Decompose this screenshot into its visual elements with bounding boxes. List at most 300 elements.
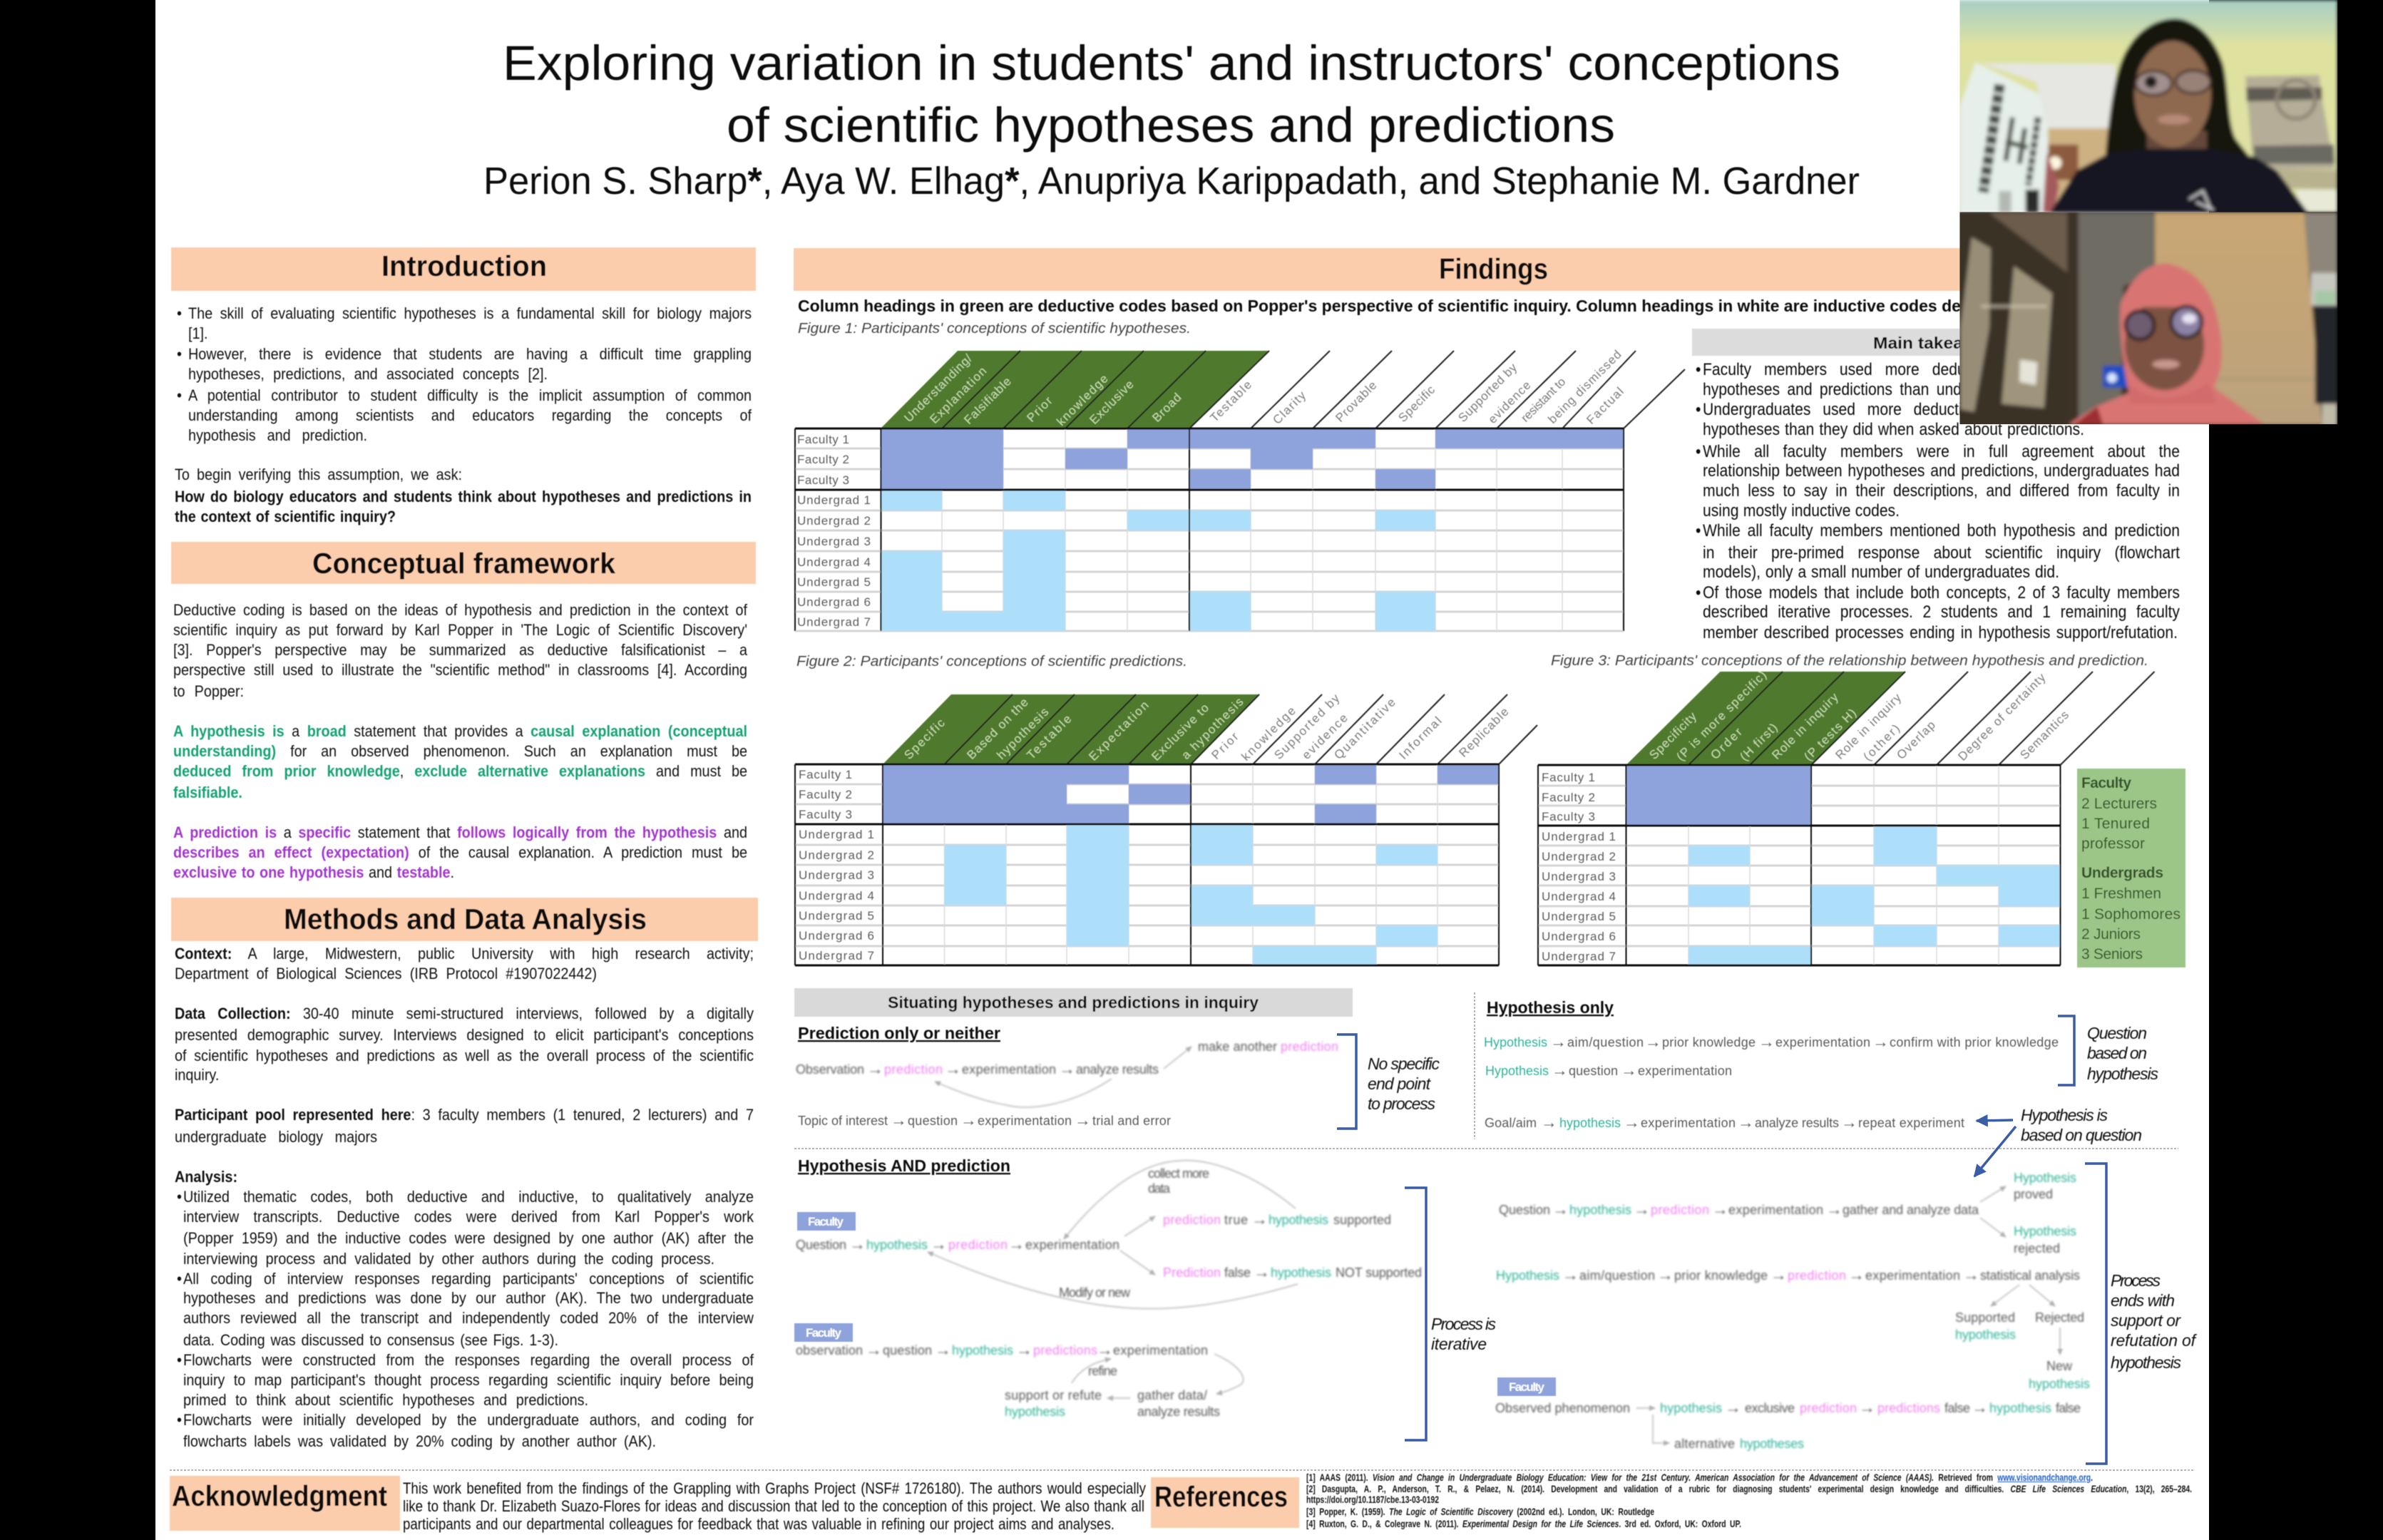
flow: question to gather and analyze data: →	[1826, 1200, 1843, 1218]
figure 1: hypotheses table: Specific	[1395, 383, 1438, 425]
text: main takeaways list	[1696, 360, 2180, 642]
text: main takeaways list: Of those models that include both concepts, 2 of 3 faculty members	[1703, 583, 2180, 602]
participants legend: 1 Tenured	[2081, 816, 2150, 832]
flow: observation to experimentation with loop: experimentation	[1113, 1343, 1208, 1357]
note: question based on hypothesis	[2087, 1024, 2159, 1083]
note: no specific end point to process: end point	[1368, 1074, 1432, 1093]
participants legend: 2 Juniors	[2081, 926, 2141, 943]
text: main takeaways list: •	[1696, 583, 1701, 602]
badge: faculty: Faculty	[808, 1215, 844, 1228]
text: methods and data analysis body: Department of Biological Sciences (IRB Protocol #1907022442)	[175, 965, 597, 982]
findings intro sentence: Column headings in green are deductive codes based on Popper's perspective of scientific inquiry. Column headings in white are inductive codes derived	[798, 297, 2000, 315]
flow: topic of interest to trial and error: Topic of interest	[798, 1114, 888, 1128]
flow: question to experimentation: false	[1224, 1266, 1251, 1280]
flow: observation to analyze results: →	[1059, 1059, 1075, 1078]
text: methods and data analysis body: authors reviewed all the transcript and independently coded 20% of the interview	[183, 1309, 754, 1327]
note: process is iterative: iterative	[1431, 1335, 1487, 1353]
participants legend	[2077, 769, 2185, 967]
figure 3: relationship table: (other)	[1860, 722, 1902, 764]
figure 2: predictions table: Undergrad 5	[799, 909, 874, 923]
figure 2: predictions table: Based on the	[964, 695, 1031, 762]
text: methods and data analysis body: interviewing process and validated by other authors during the coding process.	[183, 1250, 714, 1268]
text: conceptual framework body: deduced from prior knowledge, exclude alternative explanations and must be	[173, 762, 747, 780]
text: methods and data analysis body: Analysis:	[175, 1168, 237, 1186]
text: acknowledgment body	[402, 1479, 1147, 1533]
participants legend: 3 Seniors	[2081, 946, 2143, 962]
figure 1: hypotheses table: Broad	[1149, 391, 1184, 425]
flow: hypothesis to statistical analysis: aim/question	[1579, 1268, 1655, 1283]
figure 2: predictions table: Undergrad 7	[799, 949, 874, 962]
bracket: process is iterative	[1405, 1188, 1426, 1440]
heading: Methods and Data Analysis	[171, 898, 758, 941]
flowchart group: hypothesis and prediction, left: Hypothesis AND prediction	[798, 1156, 1010, 1175]
text: introduction body: To begin verifying this assumption, we ask:	[175, 466, 462, 483]
figure 3: relationship table: Order	[1708, 725, 1745, 762]
figure 3: relationship table	[1538, 668, 2155, 965]
title: Perion S. Sharp*, Aya W. Elhag*, Anupriya Karippadath, and Stephanie M. Gardner	[483, 160, 1860, 202]
flow: question to gather and analyze data: rejected	[2014, 1241, 2060, 1256]
text: methods and data analysis body	[175, 945, 754, 1450]
participants legend: 1 Freshmen	[2081, 885, 2161, 902]
flow: hypothesis to confirm with prior knowledge: Hypothesis	[1484, 1035, 1547, 1049]
figure 1: hypotheses table	[795, 348, 1685, 631]
flow: observation to analyze results: make another	[1198, 1040, 1277, 1054]
text: introduction body: However, there is evidence that students are having a difficult time grappling	[188, 345, 752, 363]
figure 1: hypotheses table: Undergrad 1	[797, 493, 871, 507]
flow: hypothesis to confirm with prior knowledge: confirm with prior knowledge	[1890, 1035, 2059, 1049]
flow: question to experimentation: true	[1224, 1213, 1248, 1227]
note: process ends with support or refutation: refutation of	[2111, 1331, 2198, 1350]
figure 2: green header	[883, 694, 1259, 764]
heading: Conceptual framework	[171, 542, 756, 584]
flow: hypothesis to statistical analysis: →	[1562, 1266, 1579, 1284]
text: conceptual framework body: describes an effect (expectation) of the causal explanation. A prediction must be	[173, 843, 747, 861]
flow: question to experimentation: hypothesis	[1271, 1266, 1331, 1280]
flow: hypothesis to statistical analysis: hypothesis	[1955, 1328, 2016, 1342]
text: conceptual framework body: perspective still used to illustrate the "scientific method" in classrooms [4]. According	[173, 661, 747, 679]
badge: faculty: Faculty	[806, 1326, 842, 1340]
title	[483, 36, 1860, 202]
figure 1: hypotheses table: Prior	[1024, 394, 1055, 425]
flow: goal to repeat experiment: →	[1624, 1113, 1640, 1131]
flow: question to gather and analyze data: →	[1634, 1200, 1650, 1218]
text: introduction body: hypotheses, predictions, and associated concepts [2].	[188, 365, 548, 383]
text: methods and data analysis body: All coding of interview responses regarding participants' conceptions of scientific	[183, 1270, 754, 1288]
webcam: speaker two	[1954, 210, 2337, 428]
figure 1: hypotheses table: evidence	[1485, 379, 1534, 426]
flow: hypothesis to confirm with prior knowledge: aim/question	[1567, 1035, 1644, 1049]
note: process ends with support or refutation: hypothesis	[2111, 1353, 2182, 1372]
text: methods and data analysis body: primed to think about scientific hypotheses and predictions.	[183, 1391, 588, 1409]
flow: question to gather and analyze data: prediction	[1651, 1203, 1709, 1217]
text: conceptual framework body: falsifiable.	[173, 784, 242, 801]
text: conceptual framework body: Deductive coding is based on the ideas of hypothesis and prediction in the context of	[173, 601, 747, 619]
text: conceptual framework body: scientific inquiry as put forward by Karl Popper in 'The Logic of Scientific Discovery'	[173, 621, 747, 639]
flow: observation to experimentation with loop: support or refute	[1005, 1388, 1102, 1402]
flow: question to experimentation: Question	[796, 1238, 846, 1252]
main takeaways heading bar: Main takeaways	[1873, 334, 2006, 352]
flow: hypothesis to confirm with prior knowledge: prior knowledge	[1662, 1035, 1756, 1049]
figure 1: hypotheses table: Falsifiable	[961, 374, 1014, 427]
flow: question to gather and analyze data: Hypothesis	[2014, 1171, 2076, 1185]
figure 2: predictions table: Faculty 3	[799, 808, 852, 821]
flow: observation to analyze results	[796, 1040, 1338, 1107]
flow: question to gather and analyze data: Hypothesis	[2014, 1224, 2076, 1238]
flow: observation to analyze results: experimentation	[962, 1062, 1056, 1077]
text: methods and data analysis body: interview transcripts. Deductive codes were derived from Karl Popper's work	[183, 1208, 754, 1226]
flow: goal to repeat experiment: hypothesis	[1559, 1116, 1621, 1130]
figure 1: hypotheses table: Clarity	[1270, 389, 1308, 427]
flow: hypothesis question experimentation: experimentation	[1638, 1064, 1732, 1078]
arrow: to goal flow	[1977, 1120, 2013, 1121]
flow: hypothesis to confirm with prior knowledge	[1484, 1032, 2059, 1051]
flow: observation to experimentation with loop: →	[1097, 1340, 1113, 1359]
flowchart group: prediction only or neither: Prediction only or neither	[798, 1024, 1000, 1042]
figure 3: relationship table: Role in inquiry	[1769, 690, 1841, 762]
flow: observed phenomenon to hypothesis false: Observed phenomenon	[1495, 1401, 1630, 1415]
note: no specific end point to process: No specific	[1368, 1054, 1440, 1073]
flow: hypothesis to statistical analysis: New	[2046, 1359, 2073, 1373]
figure 2 caption: Figure 2: Participants' conceptions of scientific predictions.	[796, 654, 1187, 669]
flow: hypothesis to statistical analysis: Rejected	[2035, 1310, 2084, 1325]
figure 2: predictions table: Exclusive to	[1149, 701, 1211, 764]
flow: goal to repeat experiment: →	[1841, 1113, 1857, 1131]
flow: observed phenomenon to hypothesis false: hypotheses	[1740, 1437, 1804, 1451]
flow: hypothesis question experimentation: Hypothesis	[1485, 1064, 1549, 1078]
flow: goal to repeat experiment: →	[1541, 1113, 1557, 1131]
note: process is iterative	[1431, 1315, 1496, 1353]
flowchart group: hypothesis only: Hypothesis only	[1487, 998, 1614, 1017]
flow: goal to repeat experiment: experimentation	[1641, 1116, 1736, 1130]
figure 2: predictions table: Testable	[1024, 712, 1074, 762]
flow: hypothesis to confirm with prior knowledge: →	[1872, 1032, 1889, 1051]
flow: question to experimentation: prediction	[948, 1238, 1008, 1252]
text: main takeaways list: Faculty members used more deductive codes when describing	[1703, 360, 2180, 379]
flow: observed phenomenon to hypothesis false: prediction	[1800, 1401, 1857, 1415]
flow: observed phenomenon to hypothesis false: hypothesis	[1660, 1401, 1722, 1415]
bracket: no specific end point	[1337, 1035, 1356, 1129]
text: methods and data analysis body: flowcharts labels was validated by 20% coding by another author (AK).	[183, 1432, 656, 1450]
participants legend: Faculty	[2081, 775, 2131, 791]
arrow: to question flow	[1974, 1126, 2016, 1176]
text: methods and data analysis body: (Popper 1959) and the inductive codes were designed by one author (AK) after the	[183, 1229, 754, 1247]
figure 2: predictions table: hypothesis	[994, 705, 1051, 762]
figure 2: predictions table: evidence	[1299, 711, 1351, 762]
text: main takeaways list: models), only a small number of undergraduates did.	[1703, 563, 2059, 582]
figure 2: predictions table: Supported by	[1271, 691, 1343, 762]
text: main takeaways list: hypotheses and predictions than undergraduates did.	[1703, 380, 2074, 399]
flow: observation to analyze results: Observation	[796, 1062, 864, 1077]
text: main takeaways list: •	[1696, 521, 1701, 540]
flow: question to gather and analyze data: gather and analyze data	[1843, 1203, 1979, 1217]
flow: question to experimentation: hypothesis	[1269, 1213, 1328, 1227]
flow: hypothesis to confirm with prior knowledge: →	[1550, 1032, 1567, 1051]
text: introduction body: •	[177, 386, 182, 404]
flowchart group: hypothesis only	[1484, 998, 2159, 1176]
text: references list: [2] Dasgupta, A. P., Anderson, T. R., & Pelaez, N. (2014). Development and validation of a rubric for diagnosing students' experimental design knowledge and difficulties. CBE Life Sciences Education, 13(2), 265–284.	[1306, 1483, 2192, 1494]
flow: question to experimentation: NOT supported	[1336, 1266, 1422, 1280]
figure 3: relationship table: (P tests H)	[1801, 706, 1859, 764]
flow: observation to experimentation with loop: question	[883, 1343, 932, 1357]
flow: observation to experimentation with loop: predictions	[1033, 1343, 1097, 1357]
text: main takeaways list: using mostly inductive codes.	[1703, 501, 1900, 520]
webcam videos	[1959, 0, 2337, 424]
figure 1: hypotheses table: Undergrad 2	[797, 514, 871, 528]
flow: topic of interest to trial and error: →	[891, 1111, 907, 1129]
figure 1: hypotheses table: Supported by	[1455, 361, 1520, 425]
flow: hypothesis to confirm with prior knowledge: experimentation	[1775, 1035, 1870, 1049]
figure 2: predictions table: Faculty 1	[799, 768, 852, 781]
figure 3: relationship table: Undergrad 5	[1542, 910, 1616, 923]
heading: Introduction	[171, 247, 756, 291]
flow: question to experimentation: Prediction	[1163, 1266, 1221, 1280]
figure 2: predictions table: Specific	[901, 716, 948, 762]
webcam: speaker one	[1954, 0, 2337, 212]
flow: observed phenomenon to hypothesis false: hypothesis	[1989, 1401, 2051, 1415]
flow: hypothesis to statistical analysis: hypothesis	[2029, 1377, 2090, 1391]
text: acknowledgment body: participants and our departmental colleagues for feedback that was valuable in refining our project aims and analyses.	[403, 1515, 1114, 1533]
figure 2: predictions table: Quantitative	[1331, 695, 1398, 762]
flow: hypothesis to statistical analysis: Hypothesis	[1496, 1268, 1559, 1283]
text: introduction body	[174, 304, 752, 526]
text: main takeaways list: described iterative processes. 2 students and 1 remaining faculty	[1703, 602, 2180, 622]
text: methods and data analysis body: inquiry.	[175, 1066, 219, 1084]
flow: goal to repeat experiment: →	[1738, 1113, 1754, 1131]
heading: Findings: Findings	[1439, 252, 1548, 285]
figure 2: predictions table: a hypothesis	[1179, 695, 1246, 762]
figure 3: relationship table: (P is more specific)	[1674, 668, 1769, 764]
figure 3: relationship table: Undergrad 7	[1542, 950, 1616, 963]
text: methods and data analysis body: •	[177, 1411, 182, 1429]
figure 1: hypotheses table: knowledge	[1054, 372, 1111, 428]
flow: question to experimentation: →	[1251, 1210, 1268, 1228]
flow: hypothesis to statistical analysis	[1496, 1266, 2090, 1391]
heading: situating hypotheses and predictions in inquiry	[794, 988, 1353, 1017]
flow: question to experimentation: hypothesis	[866, 1238, 928, 1252]
flow: hypothesis question experimentation: →	[1552, 1061, 1568, 1079]
badge: faculty: Faculty	[1509, 1380, 1545, 1394]
text: acknowledgment body: like to thank Dr. Elizabeth Suazo-Flores for ideas and discussion that led to the conception of this project. We also thank all	[403, 1497, 1144, 1515]
text: main takeaways list: •	[1696, 360, 1701, 379]
note: question based on hypothesis: based on	[2087, 1044, 2147, 1062]
flow: observed phenomenon to hypothesis false: exclusive	[1745, 1401, 1795, 1415]
text: introduction body: [1].	[188, 324, 208, 342]
note: process ends with support or refutation	[2111, 1271, 2198, 1372]
flow: goal to repeat experiment: repeat experiment	[1858, 1116, 1964, 1130]
text: introduction body: How do biology educators and students think about hypotheses and predictions in	[175, 488, 752, 505]
text: conceptual framework body	[173, 601, 748, 881]
flow: topic of interest to trial and error: trial and error	[1092, 1114, 1171, 1128]
figure 1: hypotheses table: Undergrad 4	[797, 555, 871, 569]
figure 1: hypotheses table: Provable	[1333, 379, 1379, 425]
figure 3: relationship table: (H first)	[1737, 721, 1780, 764]
participants legend: Undergrads	[2081, 865, 2163, 881]
text: methods and data analysis body: data. Coding was discussed to consensus (see Figs. 1-3).	[183, 1331, 558, 1349]
figure 2: predictions table: Informal	[1396, 714, 1445, 762]
flow: question to gather and analyze data: →	[1712, 1200, 1728, 1218]
note: process ends with support or refutation: ends with	[2111, 1291, 2175, 1310]
text: methods and data analysis body: Data Collection: 30-40 minute semi-structured interviews, followed by a digitally	[175, 1005, 754, 1022]
figure 2: predictions table: Replicable	[1456, 705, 1511, 760]
figure 3 caption: Figure 3: Participants' conceptions of the relationship between hypothesis and prediction.	[1551, 653, 2148, 669]
flow: topic of interest to trial and error: →	[1075, 1111, 1091, 1129]
flow: question to gather and analyze data: Question	[1499, 1203, 1550, 1217]
participants legend: 2 Lecturers	[2081, 796, 2157, 812]
figure 1: hypotheses table: Testable	[1207, 378, 1254, 425]
figure 2: predictions table: Undergrad 2	[799, 848, 874, 862]
flow: observation to analyze results: →	[867, 1059, 883, 1078]
heading: Conceptual framework: Conceptual framework	[312, 547, 615, 580]
figure 1: green header	[881, 351, 1269, 428]
figure 1: hypotheses table: Faculty 3	[797, 473, 849, 487]
figure 1: hypotheses table: Exclusive	[1087, 378, 1137, 427]
figure 1: hypotheses table: Undergrad 3	[797, 535, 871, 548]
heading: References	[1151, 1477, 1299, 1528]
flow: observed phenomenon to hypothesis false: alternative	[1674, 1437, 1735, 1451]
figure 2: predictions table: Undergrad 1	[799, 828, 874, 841]
flow: observation to experimentation with loop: hypothesis	[952, 1343, 1013, 1357]
note: process is iterative: Process is	[1431, 1315, 1496, 1333]
text: main takeaways list: member described processes ending in hypothesis support/refutation.	[1703, 623, 2178, 642]
note: process ends with support or refutation: support or	[2111, 1311, 2181, 1330]
figure 1: hypotheses table: Faculty 1	[797, 433, 849, 446]
text: main takeaways list: •	[1696, 400, 1701, 419]
text: references list: [1] AAAS (2011). Vision and Change in Undergraduate Biology Education: View for the 21st Century. American Association for the Advancement of Science (AAAS). Retrieved from www.visionandchange.org.	[1306, 1472, 2093, 1483]
note: question based on hypothesis: Question	[2087, 1024, 2147, 1042]
heading: Acknowledgment: Acknowledgment	[172, 1479, 387, 1512]
figure 2: predictions table: Undergrad 6	[799, 929, 874, 943]
note: hypothesis is based on question	[2021, 1106, 2142, 1144]
flow: hypothesis to statistical analysis: prediction	[1788, 1268, 1846, 1283]
text: introduction body: hypothesis and prediction.	[188, 426, 367, 444]
text: conceptual framework body: [3]. Popper's perspective may be summarized as deductive falsificationist – a	[173, 641, 747, 659]
text: main takeaways list: Undergraduates used more deductive codes when asked about	[1703, 400, 2180, 419]
flow: hypothesis question experimentation	[1485, 1061, 1732, 1079]
figure 1: faculty cells	[881, 428, 1624, 490]
flow: observed phenomenon to hypothesis false: predictions	[1877, 1401, 1940, 1415]
flow: observed phenomenon to hypothesis false: false	[2056, 1401, 2081, 1415]
flow: question to experimentation: collect more	[1148, 1166, 1209, 1181]
flow: question to experimentation: data	[1148, 1181, 1171, 1196]
flow: observation to experimentation with loop: →	[866, 1340, 882, 1359]
text: introduction body: A potential contributor to student difficulty is the implicit assumption of common	[188, 386, 752, 404]
figure 3: relationship table: Faculty 1	[1542, 771, 1595, 784]
flow: topic of interest to trial and error	[798, 1111, 1171, 1129]
main takeaways heading bar	[1692, 329, 2182, 356]
note: process ends with support or refutation: Process	[2111, 1271, 2161, 1290]
flow: observation to analyze results: →	[945, 1059, 961, 1078]
bracket: question based on hypothesis	[2058, 1016, 2074, 1085]
text: methods and data analysis body: •	[177, 1351, 182, 1369]
flow: hypothesis to confirm with prior knowledge: →	[1758, 1032, 1775, 1051]
flow: hypothesis question experimentation: →	[1621, 1061, 1637, 1079]
heading: Methods and Data Analysis: Methods and Data Analysis	[284, 903, 647, 935]
flow: hypothesis to statistical analysis: →	[1657, 1266, 1674, 1284]
text: main takeaways list: much less to say in their descriptions, and differed from faculty in	[1703, 481, 2180, 500]
figure 1: hypotheses table: Undergrad 6	[797, 595, 871, 609]
flow: question to gather and analyze data	[1499, 1171, 2076, 1256]
text: main takeaways list: While all faculty members mentioned both hypothesis and prediction	[1703, 521, 2180, 540]
heading: Findings	[794, 248, 2006, 291]
flow: observation to experimentation with loop: →	[1016, 1340, 1032, 1359]
figure 3: relationship table: Undergrad 1	[1542, 830, 1616, 843]
flow: observed phenomenon to hypothesis false: →	[1972, 1398, 1988, 1417]
heading: Introduction: Introduction	[381, 250, 547, 282]
text: introduction body: •	[177, 304, 182, 322]
flow: topic of interest to trial and error: question	[908, 1114, 958, 1128]
bracket: process ends with support	[2085, 1164, 2106, 1464]
note: hypothesis is based on question: based on question	[2021, 1126, 2142, 1144]
figure 2: predictions table: Faculty 2	[799, 788, 852, 801]
heading: Acknowledgment	[170, 1476, 400, 1531]
text: main takeaways list: in their pre-primed response about scientific inquiry (flowchart	[1703, 543, 2180, 563]
text: references list: [4] Ruxton, G. D., & Colegrave N. (2011). Experimental Design for the Life Sciences. 3rd ed. Oxford, UK: Oxford UP.	[1306, 1518, 1741, 1529]
flow: hypothesis to statistical analysis: →	[1848, 1266, 1865, 1284]
text: methods and data analysis body: of scientific hypotheses and predictions as well as the overall process of the scientific	[175, 1047, 754, 1064]
flow: question to experimentation: →	[849, 1235, 866, 1253]
figure 3: relationship table: Overlap	[1894, 718, 1938, 762]
figure 3: green header	[1626, 672, 1905, 765]
flow: observation to experimentation with loop: hypothesis	[1005, 1405, 1065, 1419]
flow: question to experimentation: →	[1008, 1235, 1025, 1253]
flow: hypothesis to statistical analysis: prior knowledge	[1674, 1268, 1768, 1283]
text: acknowledgment body: This work benefited from the findings of the Grappling with Graphs Project (NSF# 1726180). The authors would especially	[403, 1479, 1146, 1497]
flow: question to experimentation: Modify or new	[1059, 1285, 1131, 1300]
text: conceptual framework body: exclusive to one hypothesis and testable.	[173, 863, 454, 881]
flow: hypothesis to statistical analysis: Supported	[1955, 1310, 2015, 1325]
figure 3: relationship table: Specificity	[1646, 709, 1699, 762]
figure 2: predictions table: Undergrad 3	[799, 868, 874, 882]
text: conceptual framework body: to Popper:	[173, 682, 244, 700]
text: methods and data analysis body: •	[177, 1188, 182, 1206]
figure 1: hypotheses table: resistant to	[1518, 375, 1568, 425]
flowchart group: hypothesis and prediction, right	[1495, 1164, 2198, 1464]
flow: topic of interest to trial and error: →	[960, 1111, 977, 1129]
flow: hypothesis to statistical analysis: statistical analysis	[1980, 1268, 2080, 1283]
figure 1: hypotheses table: Factual	[1584, 384, 1626, 427]
flow: goal to repeat experiment: Goal/aim	[1485, 1116, 1537, 1130]
flow: hypothesis to statistical analysis: experimentation	[1865, 1268, 1960, 1283]
text: methods and data analysis body: undergraduate biology majors	[175, 1128, 377, 1146]
flow: observation to analyze results: prediction	[884, 1062, 943, 1077]
flow: topic of interest to trial and error: experimentation	[978, 1114, 1072, 1128]
figure 3: relationship table: Undergrad 2	[1542, 850, 1616, 863]
figure 3: relationship table: Undergrad 3	[1542, 870, 1616, 883]
flow: observation to analyze results: prediction	[1281, 1040, 1338, 1054]
text: main takeaways list: •	[1696, 442, 1701, 461]
title: of scientific hypotheses and predictions	[727, 98, 1615, 153]
text: references list: https://doi.org/10.1187/cbe.13-03-0192	[1306, 1494, 1439, 1505]
flow: question to experimentation: →	[1254, 1263, 1270, 1281]
badge: faculty	[1497, 1377, 1556, 1396]
text: conceptual framework body: A hypothesis is a broad statement that provides a causal explanation (conceptual	[173, 722, 747, 740]
participants legend: professor	[2081, 836, 2145, 852]
text: methods and data analysis body: •	[177, 1270, 182, 1288]
figure 1: hypotheses table: Explanation	[927, 364, 989, 426]
flowchart group: hypothesis and prediction, left	[794, 1156, 1496, 1440]
figure 3: relationship table: Undergrad 6	[1542, 930, 1616, 943]
text: references list: [3] Popper, K. (1959). The Logic of Scientific Discovery (2002nd ed.). London, UK: Routledge	[1306, 1506, 1654, 1517]
flow: hypothesis to statistical analysis: →	[1963, 1266, 1979, 1284]
flow: goal to repeat experiment: analyze results	[1755, 1116, 1839, 1130]
flow: observation to experimentation with loop: refine	[1088, 1364, 1117, 1378]
text: references list	[1306, 1472, 2192, 1530]
flow: question to gather and analyze data: hypothesis	[1569, 1203, 1631, 1217]
flow: question to gather and analyze data: experimentation	[1728, 1203, 1823, 1217]
flow: goal to repeat experiment	[1485, 1113, 1964, 1131]
flow: observation to experimentation with loop: observation	[796, 1343, 863, 1357]
flow: question to gather and analyze data: →	[1552, 1200, 1569, 1218]
